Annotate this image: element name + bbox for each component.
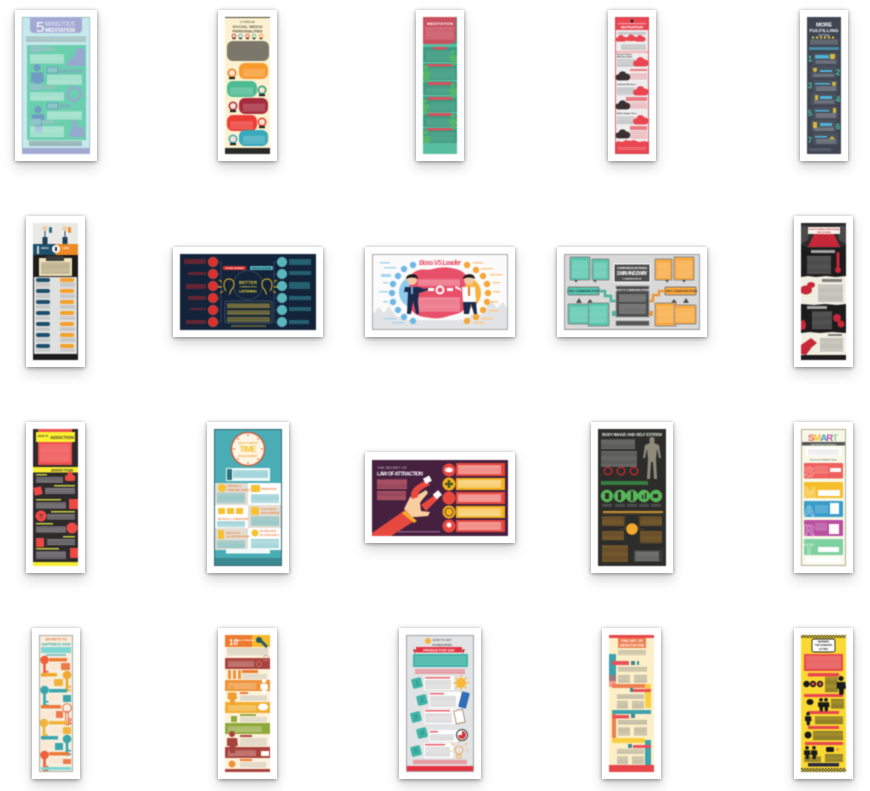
headings: Build a Support Team — [617, 112, 637, 115]
green bubble — [227, 81, 266, 97]
thumbnail: how to beat addiction: ? — [39, 514, 43, 520]
maroon bubble — [228, 98, 268, 114]
green heading — [601, 481, 648, 485]
keys — [40, 656, 49, 677]
text panel — [225, 301, 272, 323]
center gear and hands — [428, 286, 453, 294]
title: MORE — [816, 22, 832, 28]
footer — [225, 148, 270, 154]
teal top panels — [570, 257, 609, 280]
clock: HOW TO BOOST — [238, 442, 258, 445]
icons — [803, 676, 846, 759]
title: Boss VS Leader — [419, 260, 462, 267]
thumbnail: productive day: 3 — [414, 715, 418, 721]
title: Job Today — [818, 35, 830, 37]
thumbnail: productive day: 1 — [415, 681, 419, 687]
orange bottom panels — [655, 303, 696, 326]
thumbnail: 5 minutes meditation — [22, 17, 90, 154]
card: more fulfilling job — [800, 10, 848, 161]
winding path — [609, 654, 651, 765]
ear icons — [218, 279, 278, 294]
center title: BETTER — [239, 280, 258, 285]
right text — [289, 259, 311, 324]
T panel: T — [804, 541, 814, 558]
red intro panel — [38, 429, 72, 465]
center title: LISTENING — [239, 290, 257, 294]
grid — [214, 483, 282, 550]
title box: COMMUNICATION — [623, 278, 642, 280]
card: secret to happiness — [32, 628, 80, 779]
red blob — [410, 267, 467, 318]
title: HAPPINESS NOW — [42, 642, 71, 646]
title box: 1 WAY AND 2 WAY — [616, 271, 648, 277]
step numbers: 7 — [808, 136, 813, 145]
icon circles — [442, 464, 456, 532]
header — [225, 635, 270, 648]
white boxes — [424, 676, 461, 758]
title: THE SECRET OF — [377, 466, 408, 470]
title — [432, 638, 453, 647]
red shapes — [800, 252, 844, 355]
panel text — [570, 260, 694, 323]
background hills — [372, 300, 508, 330]
high / low band: HIGH — [41, 246, 48, 250]
listener labels — [223, 266, 273, 270]
footer — [214, 549, 282, 566]
cream row text — [240, 674, 267, 768]
thumbnail: motivation — [615, 17, 649, 155]
red icons — [33, 472, 78, 558]
leader figure — [455, 274, 477, 314]
teal band — [41, 647, 71, 653]
teal pills — [36, 278, 50, 348]
title — [810, 22, 839, 37]
red clouds row — [616, 34, 646, 42]
title tab: 5 — [36, 19, 44, 36]
high / low band: LOW — [62, 246, 69, 250]
red footer — [609, 765, 654, 772]
title: SOCIAL MEDIA — [232, 24, 263, 29]
title: SMART — [808, 433, 838, 444]
clock — [232, 432, 264, 466]
card: motivation — [608, 10, 656, 161]
yellow subtitle band: ADDICTION — [51, 468, 73, 472]
two way label: 2 WAY COMMUNICATION — [664, 289, 697, 293]
thumbnail: secret to happiness — [39, 635, 73, 772]
thumbnail: body image and self esteem — [598, 429, 666, 566]
section labels — [612, 661, 651, 748]
teal panel — [413, 654, 468, 667]
card: meditation benefits — [416, 10, 464, 161]
title — [232, 20, 263, 34]
R panel: R — [804, 522, 815, 539]
red bubble — [227, 115, 266, 131]
title tab: MEDITATION — [45, 28, 75, 34]
red panel — [804, 654, 843, 671]
arm and hand — [372, 490, 430, 536]
title box: COMPARISON BETWEEN — [617, 266, 647, 270]
red header: MEDITATION — [427, 21, 453, 26]
bar text — [458, 465, 501, 530]
headings — [617, 53, 637, 115]
left text — [184, 259, 206, 324]
red footer — [406, 766, 474, 772]
header: 10 — [229, 638, 238, 647]
text blocks — [426, 51, 455, 142]
step numbers — [808, 54, 841, 145]
headings — [41, 658, 69, 756]
bulb — [450, 740, 468, 758]
cell icons — [218, 484, 260, 539]
title: HOW TO SET — [433, 638, 452, 642]
S panel: S — [804, 464, 814, 481]
clipboard — [454, 709, 465, 724]
yellow title band — [36, 432, 75, 442]
black bar — [808, 763, 839, 766]
title: YOURSELF UP FOR A — [432, 643, 453, 647]
card: law of attraction — [365, 452, 515, 543]
red circles column — [208, 257, 218, 327]
headings: Celebrate Milestones — [617, 83, 636, 86]
dark subtitle band: Goal Setting Techniques — [811, 443, 837, 446]
thumbnail: productive day — [406, 635, 474, 772]
title — [42, 638, 71, 646]
blue icons — [389, 262, 416, 324]
numbered teal tags — [410, 677, 428, 757]
colored bars — [456, 463, 505, 532]
thumbnail: art of negotiation — [609, 635, 654, 772]
thumbnail: emotional meltdown — [800, 223, 846, 360]
A panel: A — [804, 503, 815, 520]
orange half circle — [449, 277, 481, 309]
center title — [234, 270, 262, 300]
header — [801, 223, 846, 248]
title sign — [812, 639, 835, 652]
body figure — [643, 437, 661, 479]
cell headings: WITH PURPOSE — [261, 512, 280, 515]
title: NEGOTIATION — [620, 644, 645, 648]
card: productive day — [399, 628, 481, 779]
figures header — [33, 223, 78, 244]
trophy icons — [813, 54, 836, 139]
thumbnail: productive day: 4 — [420, 731, 424, 737]
title: PERSONALITIES — [232, 28, 263, 34]
step text — [813, 60, 836, 144]
step numbers: 5 — [808, 109, 813, 118]
thumbnail: more fulfilling job — [807, 17, 841, 154]
how-to heading: How to Use S.M.A.R.T Goals — [810, 458, 838, 462]
figures — [422, 50, 457, 148]
headings: Resolve Projects — [617, 53, 632, 56]
cell text — [217, 493, 279, 548]
center panel: WHAT IS COMMUNICATION? — [615, 288, 651, 292]
footer band — [22, 148, 90, 154]
red rings — [604, 467, 638, 475]
footer bar — [616, 321, 649, 326]
orange bubble — [228, 63, 268, 79]
one way label: 1 WAY COMMUNICATION — [567, 289, 600, 293]
color bands — [225, 658, 270, 772]
yellow footer — [33, 562, 78, 566]
card: emotional meltdown — [794, 216, 853, 367]
comparison panel — [34, 277, 77, 354]
card: public speaking tips — [218, 628, 277, 779]
intro text — [377, 479, 407, 500]
text boxes — [41, 663, 63, 764]
row text — [36, 283, 75, 352]
step numbers: 4 — [836, 95, 841, 104]
step numbers: 1 — [808, 54, 813, 64]
header: HOW TO HANDLE EMOTIONAL — [809, 228, 840, 231]
clock: MANAGEMENT — [239, 454, 258, 458]
cell headings: TIMELINE SHEET — [227, 488, 250, 492]
section text — [36, 477, 75, 559]
note card — [39, 256, 72, 276]
connectors — [218, 262, 277, 322]
thumbnail: public speaking tips — [225, 635, 270, 772]
title: THE ART OF — [621, 639, 643, 643]
footer band — [423, 143, 457, 154]
thumbnail: meditation benefits — [422, 17, 457, 154]
cell headings: ALL DISTRACTIONS — [226, 536, 250, 538]
headings: With Direct Work — [617, 56, 633, 58]
title sign: ACTING — [819, 648, 828, 651]
dark clouds — [615, 71, 630, 138]
black text blocks — [804, 677, 844, 762]
title sign: THE DANGERS — [815, 644, 833, 647]
title: LAW OF ATTRACTION — [377, 472, 423, 478]
cell headings — [218, 484, 280, 538]
intro bubble — [227, 41, 269, 61]
cream row headings — [240, 670, 258, 761]
triangles — [574, 280, 689, 303]
title: 5 TYPES OF — [240, 20, 255, 24]
step numbers: 6 — [836, 122, 841, 132]
orange top panels — [655, 257, 694, 280]
thumbnail: law of attraction — [372, 460, 508, 536]
title tab — [30, 17, 82, 36]
red labels — [804, 673, 843, 745]
orange icons — [464, 262, 491, 324]
cell headings: WATCH OUT — [226, 532, 241, 535]
footer box — [806, 557, 841, 563]
boss figure — [404, 274, 428, 314]
cell headings: PLAN AHEAD — [261, 508, 277, 511]
teal circles column — [277, 257, 287, 327]
title: FULFILLING — [810, 28, 839, 34]
listener labels: PASSIVE LISTENER — [252, 267, 272, 270]
blue labels — [379, 262, 404, 324]
stopwatch — [456, 730, 468, 740]
orange center circle — [626, 523, 638, 535]
card: boss vs leader — [365, 247, 515, 337]
cell headings: BE REALISTIC — [260, 530, 277, 533]
teal bottom panels — [568, 303, 609, 326]
band text — [228, 661, 262, 756]
card: time management — [207, 422, 289, 573]
phone — [458, 691, 470, 709]
blue half circle — [399, 276, 431, 308]
cell headings: PRIORITIZE — [261, 487, 277, 491]
title tab: MINUTES — [45, 21, 76, 28]
orange heading — [603, 511, 663, 513]
yellow title band: HOW TO — [38, 435, 48, 438]
thumbnail: smart goals — [801, 429, 846, 566]
step panels — [811, 53, 838, 145]
red clouds — [633, 57, 649, 124]
small icons — [628, 661, 639, 748]
step numbers: 2 — [836, 68, 841, 77]
card: smart goals — [794, 422, 853, 573]
cell headings: BE REALLY CONSISTENT — [218, 518, 249, 521]
thumbnail: high and low self esteem — [33, 223, 78, 360]
card: avoid bad language — [794, 628, 853, 779]
card: social media personalities — [218, 10, 277, 161]
footer — [41, 767, 71, 770]
M panel: M — [804, 484, 816, 500]
thumbnail: boss vs leader — [372, 254, 508, 330]
title — [618, 638, 646, 648]
center title: COMMUNICATION — [239, 286, 257, 288]
box headings — [425, 677, 450, 746]
green circles — [601, 490, 662, 502]
intro box — [226, 468, 270, 481]
thumbnail: how to beat addiction — [33, 429, 78, 566]
magnet — [411, 475, 442, 511]
section text — [807, 250, 843, 352]
section headings — [36, 474, 75, 550]
reference list — [633, 550, 663, 562]
row icons — [227, 656, 269, 768]
step numbers: 3 — [808, 82, 813, 90]
red header: MOTIVATION — [621, 26, 643, 30]
header: MELTDOWNS — [817, 232, 831, 234]
section text — [617, 667, 647, 764]
card: 1 way and 2 way communication — [557, 247, 707, 337]
cream sections — [801, 276, 846, 355]
orange labels — [473, 262, 502, 324]
thumbnail: productive day: 2 — [420, 698, 424, 704]
box text — [425, 680, 456, 757]
step headings — [815, 55, 832, 138]
title box — [614, 264, 650, 282]
thumbnail: better communication through listening — [180, 254, 316, 330]
pipes — [599, 291, 616, 301]
card: better listening — [173, 247, 323, 337]
green panel — [27, 45, 86, 140]
colored boxes — [61, 663, 70, 670]
header: PUBLIC SPEAKING — [235, 639, 255, 642]
thumbnail: productive day: 5 — [414, 749, 418, 755]
thumbnail: yellow safety infographic — [801, 635, 846, 772]
title — [377, 466, 423, 478]
card: art of negotiation — [602, 628, 661, 779]
card: body image and self esteem — [591, 422, 673, 573]
intro text — [601, 439, 637, 467]
card: high and low self esteem — [26, 216, 85, 367]
checker strips — [801, 635, 846, 772]
clock: TIME — [240, 445, 257, 454]
thumbnail: social media personalities — [225, 17, 270, 154]
title: BODY IMAGE AND SELF ESTEEM — [602, 432, 662, 437]
section labels — [427, 47, 453, 130]
thumbnail: 1 way and 2 way communication — [564, 254, 700, 330]
cell headings: CREATE A — [227, 484, 241, 488]
high / low band — [33, 244, 78, 255]
cell headings: IN YOUR GOALS — [260, 534, 279, 537]
card: 5 minutes meditation — [15, 10, 97, 161]
title sign: WARNING — [818, 640, 829, 644]
orange text columns — [602, 516, 662, 562]
teal bubble — [228, 130, 268, 146]
ribbon: PRODUCTIVE DAY — [423, 648, 456, 652]
yellow title band: ADDICTION — [50, 435, 74, 440]
red footer — [615, 140, 649, 155]
thumbnail: time management — [214, 429, 282, 566]
orange pills — [60, 278, 74, 348]
sun — [453, 675, 469, 691]
listener labels: ACTIVE LISTENER — [226, 267, 244, 270]
title: SECRETS TO — [45, 638, 67, 642]
card: addiction — [26, 422, 85, 573]
